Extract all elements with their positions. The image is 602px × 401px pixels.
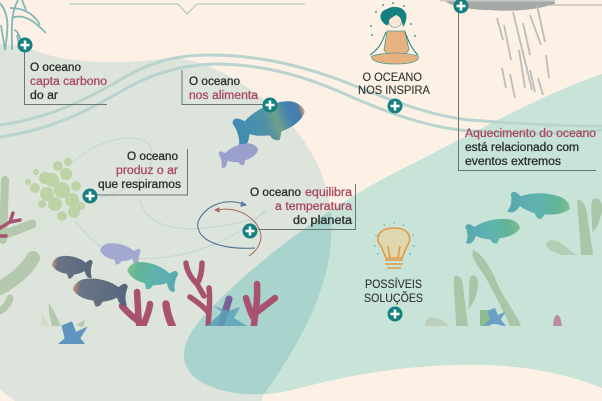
plus button: solutions (388, 306, 402, 322)
icon: light bulb (373, 222, 415, 268)
fish: lilac (98, 240, 143, 269)
right starfish (480, 308, 507, 327)
heading: the ocean inspires us: NOS INSPIRA (358, 83, 430, 97)
callout: produces air (96, 149, 188, 195)
plus button: carbon (18, 38, 32, 52)
pink coral stub (553, 315, 562, 326)
heading: possible solutions (364, 276, 423, 305)
plus button: food (262, 98, 278, 112)
callout: captures carbon: capta carbono (30, 76, 107, 88)
callout: produces air: que respiramos (98, 179, 181, 191)
fish: dark (71, 276, 130, 311)
plus button: extreme events (454, 0, 468, 14)
callout: feeds us: O oceano (189, 76, 240, 88)
callout: feeds us: nos alimenta (189, 90, 259, 102)
overlap of ocean areas (184, 210, 332, 394)
air and temperature swirl lines (70, 138, 267, 258)
heading: the ocean inspires us (358, 70, 430, 97)
ocean current waves (0, 55, 602, 137)
callout: balances temperature: a temperatura (275, 201, 353, 213)
seaweed cluster (25, 158, 85, 221)
fish: teal (124, 258, 180, 296)
callout: produces air: O oceano (127, 151, 178, 163)
fish: right lower (463, 216, 522, 248)
right green plants (425, 198, 602, 326)
callout: captures carbon: do ar (30, 90, 58, 102)
rain streaks (497, 5, 549, 98)
plus button: air (82, 188, 98, 204)
fish: right upper (507, 190, 571, 222)
fish: large blue (229, 94, 311, 154)
callout: captures carbon (24, 52, 107, 104)
top divider with notch (70, 4, 305, 14)
callout: produces air: produz o ar (116, 165, 178, 177)
callout: extreme events (458, 5, 602, 170)
callout: extreme events: eventos extremos (465, 156, 561, 168)
decorative mangrove plant (0, 0, 46, 50)
plus button: inspiration (388, 98, 402, 114)
temperature arrows (198, 202, 261, 256)
callout: feeds us (182, 70, 265, 104)
callout: balances temperature (250, 184, 356, 230)
fish: grey (50, 254, 94, 282)
fish: purple (217, 140, 261, 172)
heading: possible solutions: POSSÍVEIS (365, 276, 422, 291)
callout: extreme events: Aquecimento do oceano (465, 128, 596, 140)
heading: the ocean inspires us: O OCEANO (362, 70, 422, 84)
callout: extreme events: está relacionado com (465, 142, 579, 154)
mint ocean area (184, 74, 602, 394)
callout: balances temperature: equilibra (305, 187, 353, 199)
callout: balances temperature: O oceano (250, 187, 301, 199)
plus button: temperature (242, 224, 258, 238)
bottom plants and starfish, left (41, 304, 88, 344)
callout: captures carbon: O oceano (30, 62, 81, 74)
grey-green ocean area (0, 44, 332, 401)
red corals (122, 263, 275, 332)
heading: possible solutions: SOLUÇÕES (364, 290, 423, 305)
starfish on overlap (207, 306, 247, 326)
callout: balances temperature: do planeta (293, 215, 353, 227)
left green plants (0, 180, 33, 311)
icon: meditating woman (370, 2, 418, 64)
left coral (0, 213, 20, 236)
rain cloud (440, 0, 556, 11)
